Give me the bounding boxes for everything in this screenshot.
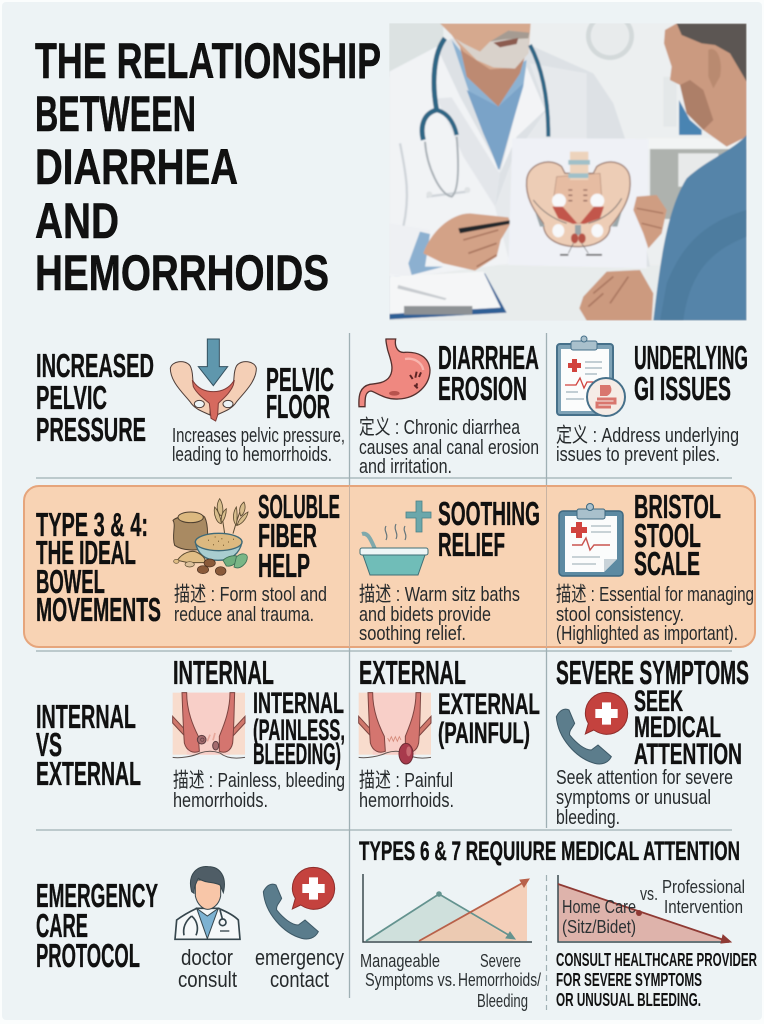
chart labels: home care vs professional: vs. xyxy=(640,883,658,904)
heading: underlying gi issues xyxy=(634,339,748,407)
chart labels: manageable vs severe: Hemorrhoids/ xyxy=(458,969,542,990)
icon: sitz bath basin xyxy=(360,501,431,575)
pelvis diagram xyxy=(527,162,630,247)
heading: pelvic floor: PELVIC xyxy=(266,361,334,398)
icon: pelvic floor with down arrow xyxy=(170,339,256,421)
text: diarrhea erosion description: 定义 : Chronic diarrhea xyxy=(359,416,520,439)
chart labels: manageable vs severe: Symptoms vs. xyxy=(365,969,456,990)
row heading: increased pelvic pressure: PELVIC xyxy=(36,379,107,416)
title: BETWEEN xyxy=(35,86,196,142)
row heading: emergency care protocol: PROTOCOL xyxy=(36,937,140,974)
heading: pelvic floor: FLOOR xyxy=(266,388,330,425)
chart labels: home care vs professional: Intervention xyxy=(664,896,743,917)
text: seek attention description: bleeding. xyxy=(556,806,620,829)
row heading: type 3 and 4 xyxy=(36,506,161,628)
text: pelvic floor description: Increases pelvic pressure, xyxy=(172,424,345,447)
heading: soothing relief xyxy=(438,495,540,563)
icon: phone with medical bubble xyxy=(556,692,628,764)
row heading: emergency care protocol xyxy=(36,877,158,974)
row heading: internal vs external: EXTERNAL xyxy=(36,755,141,792)
diagram sheet xyxy=(508,138,648,268)
label: emergency contact: contact xyxy=(270,967,329,992)
doctor's coat xyxy=(444,38,650,266)
heading: bristol stool scale: STOOL xyxy=(634,517,701,554)
icon: internal hemorrhoids diagram xyxy=(173,693,245,758)
neck and face xyxy=(460,47,527,107)
icon: bristol scale clipboard xyxy=(559,504,623,576)
heading: soothing relief: SOOTHING xyxy=(438,495,540,532)
text: pelvic floor description: leading to hemorrhoids. xyxy=(172,443,332,466)
heading: internal column: INTERNAL xyxy=(173,654,274,691)
icon: emergency phone xyxy=(263,867,335,939)
doctor's shirt xyxy=(452,40,527,170)
text: underlying issues description xyxy=(556,424,739,466)
title xyxy=(35,33,381,301)
chart labels: manageable vs severe: Bleeding xyxy=(477,990,528,1011)
text: diarrhea erosion description xyxy=(359,416,539,478)
text: internal description: 描述 : Painless, bleeding xyxy=(173,769,345,792)
text: internal description xyxy=(173,769,345,812)
row heading: increased pelvic pressure: PRESSURE xyxy=(36,411,146,448)
icon: external hemorrhoids diagram xyxy=(359,693,431,764)
chart: home care vs professional intervention xyxy=(558,875,731,943)
icon: stomach xyxy=(359,339,430,407)
holding hand xyxy=(633,195,667,248)
heading: soluble fiber help: SOLUBLE xyxy=(258,488,340,525)
row heading: type 3 and 4: MOVEMENTS xyxy=(36,591,161,628)
heading: bristol stool scale xyxy=(634,488,721,582)
chart labels: home care vs professional: Home Care xyxy=(562,896,636,917)
heading: internal painless: BLEEDING) xyxy=(253,738,341,771)
row heading: type 3 and 4: THE IDEAL xyxy=(36,534,136,571)
title: HEMORRHOIDS xyxy=(35,245,329,301)
text: seek attention description xyxy=(556,766,733,829)
icon: soluble fiber grains xyxy=(173,499,248,575)
grid dividers xyxy=(36,333,732,998)
text: soothing description: and bidets provide xyxy=(359,603,491,626)
heading: diarrhea erosion: EROSION xyxy=(438,370,527,407)
heading: external painful xyxy=(438,688,540,750)
icon: clipboard with intestine badge xyxy=(557,336,625,416)
patient xyxy=(664,23,747,147)
text: bristol description: stool consistency. xyxy=(556,603,684,626)
heading: soluble fiber help xyxy=(258,488,340,584)
chart labels: home care vs professional: Professional xyxy=(662,876,745,897)
dashed separator xyxy=(546,875,548,1010)
text: pelvic floor description xyxy=(172,424,345,466)
heading: bristol stool scale: SCALE xyxy=(634,545,700,582)
clipboard xyxy=(389,273,507,319)
text: bristol description xyxy=(556,583,754,645)
title: DIARRHEA xyxy=(35,139,238,195)
chart labels: manageable vs severe: Severe xyxy=(480,950,521,971)
heading: internal painless: INTERNAL xyxy=(253,687,344,720)
text: internal description: hemorrhoids. xyxy=(173,789,268,812)
row heading: internal vs external xyxy=(36,698,141,792)
text: external description xyxy=(359,769,454,812)
text: soothing description xyxy=(359,583,520,645)
heading: internal painless: (PAINLESS, xyxy=(253,714,345,747)
text: diarrhea erosion description: and irritation. xyxy=(359,455,452,478)
label: doctor consult xyxy=(178,945,237,992)
label: doctor consult: doctor xyxy=(181,945,233,970)
row heading: increased pelvic pressure xyxy=(36,347,154,448)
chart labels: manageable vs severe xyxy=(360,950,542,1011)
text: external description: hemorrhoids. xyxy=(359,789,454,812)
heading: soluble fiber help: FIBER xyxy=(258,517,317,554)
row heading: type 3 and 4: BOWEL xyxy=(36,563,105,600)
row heading: type 3 and 4: TYPE 3 & 4: xyxy=(36,506,148,543)
heading: diarrhea erosion xyxy=(438,339,539,407)
heading: external column: EXTERNAL xyxy=(359,654,466,691)
chart: manageable vs severe xyxy=(363,874,532,942)
row heading: emergency care protocol: CARE xyxy=(36,907,88,944)
icon: doctor xyxy=(175,866,240,939)
panel: highlighted row background xyxy=(24,486,755,647)
text: fiber description: 描述 : Form stool and xyxy=(174,583,327,606)
photo: doctor showing pelvis diagram to patient xyxy=(389,23,747,321)
text: external description: 描述 : Painful xyxy=(359,769,453,792)
row heading: internal vs external: INTERNAL xyxy=(36,698,136,735)
title: THE RELATIONSHIP xyxy=(35,33,381,89)
text: diarrhea erosion description: causes anal canal erosion xyxy=(359,436,539,459)
heading: external painful: (PAINFUL) xyxy=(438,717,530,750)
title: AND xyxy=(35,193,119,249)
text: seek attention description: symptoms or unusual xyxy=(556,786,711,809)
heading: external painful: EXTERNAL xyxy=(438,688,540,721)
stethoscope xyxy=(422,38,445,140)
chart labels: manageable vs severe: Manageable xyxy=(360,950,440,971)
heading: seek medical attention: SEEK xyxy=(634,685,683,718)
chart labels: home care vs professional xyxy=(562,876,745,937)
chart labels: home care vs professional: (Sitz/Bidet) xyxy=(562,916,636,937)
label: emergency contact xyxy=(255,945,344,992)
heading: seek medical attention xyxy=(634,685,742,771)
heading: pelvic floor xyxy=(266,361,334,425)
text: fiber description: reduce anal trauma. xyxy=(174,603,314,626)
sleeve and hand with pen xyxy=(402,226,404,227)
heading: soluble fiber help: HELP xyxy=(258,547,310,584)
heading: internal painless xyxy=(253,687,345,771)
text: soothing description: 描述 : Warm sitz baths xyxy=(359,583,520,606)
label: emergency contact: emergency xyxy=(255,945,344,970)
row heading: emergency care protocol: EMERGENCY xyxy=(36,877,158,914)
text: fiber description xyxy=(174,583,327,626)
row heading: internal vs external: VS xyxy=(36,726,62,763)
callout: consult healthcare provider xyxy=(556,950,757,1010)
heading: soothing relief: RELIEF xyxy=(438,526,505,563)
heading: diarrhea erosion: DIARRHEA xyxy=(438,339,539,376)
row heading: increased pelvic pressure: INCREASED xyxy=(36,347,154,384)
text: underlying issues description: issues to prevent piles. xyxy=(556,443,720,466)
highlighted row column lines xyxy=(350,486,546,647)
text: soothing description: soothing relief. xyxy=(359,622,466,645)
label: doctor consult: consult xyxy=(178,967,237,992)
